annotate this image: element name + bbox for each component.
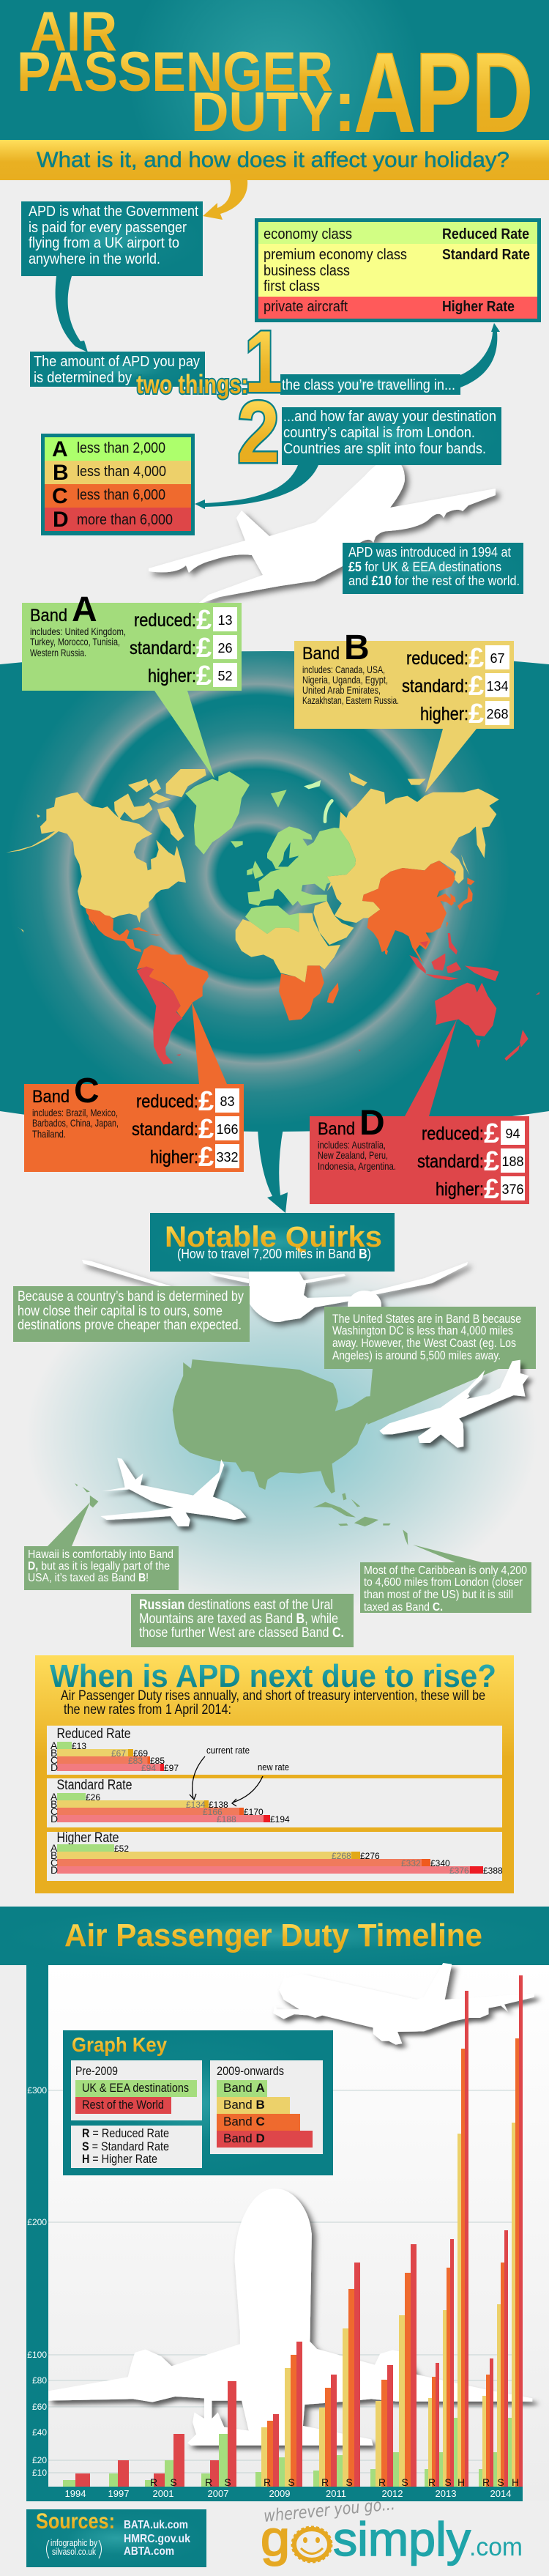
rate letters: R	[264, 2476, 271, 2488]
pointer: Hawaii	[48, 1502, 90, 1546]
panel: band A: Western Russia.	[30, 647, 86, 658]
panel: band D: 376	[501, 1182, 524, 1197]
chart: reduced rate: D	[51, 1762, 58, 1773]
key: 2009-onwards: Band A	[223, 2081, 265, 2095]
bars: 2014	[479, 1975, 523, 2487]
plane left	[100, 1458, 247, 1526]
chart: higher rate: £52	[114, 1844, 129, 1854]
annotation: current rate	[190, 1745, 250, 1800]
panel: band A: £	[196, 661, 212, 691]
panel: band D: £	[484, 1174, 499, 1205]
gosimply logo: simply	[333, 2512, 471, 2566]
band distance table	[41, 434, 195, 535]
panel: band A: 26	[217, 641, 233, 656]
panel: band B: £	[468, 671, 484, 702]
chart: standard rate: B	[51, 1798, 57, 1810]
chart axis: £40	[32, 2427, 47, 2438]
panel: band D: New Zealand, Peru,	[318, 1149, 388, 1161]
sources: infographic by	[51, 2537, 97, 2548]
chart: standard rate	[47, 1778, 502, 1827]
key: rate letters: H = Higher Rate	[82, 2152, 157, 2166]
sources	[26, 2509, 206, 2567]
US map	[75, 1359, 408, 1545]
panel: band B: 67	[490, 651, 505, 666]
chart: higher rate: £388	[483, 1866, 503, 1876]
panel: band B: 268	[486, 707, 509, 721]
panel: band C: 332	[216, 1150, 239, 1165]
world map background with rings	[0, 651, 549, 1132]
panel: band B: Kazakhstan, Eastern Russia.	[302, 694, 399, 706]
bars: 2009	[255, 2342, 302, 2487]
panel: band A: reduced:	[134, 610, 196, 631]
intro text box	[21, 201, 203, 276]
chart axis: £80	[32, 2375, 47, 2386]
chart: reduced rate: £83	[128, 1756, 143, 1766]
quirk box: United States: Angeles) is around 5,500 miles away.	[332, 1348, 501, 1362]
band distance table: less than 6,000	[77, 487, 165, 503]
subtitle band: What is it, and how does it affect your holiday?	[37, 148, 509, 172]
distance box: Countries are split into four bands.	[283, 441, 486, 457]
panel: band D: standard:	[417, 1151, 484, 1172]
band distance table: more than 6,000	[77, 512, 173, 528]
key: 2009-onwards: Band B	[223, 2098, 265, 2112]
chart: standard rate: Standard Rate	[57, 1778, 132, 1793]
distance box: country’s capital is from London.	[283, 425, 475, 441]
quirk box: Russia: Mountains are taxed as Band B, while	[139, 1611, 338, 1627]
class table: premium economy class	[264, 247, 407, 263]
key: rate letters: R = Reduced Rate	[82, 2126, 169, 2140]
annotation: new rate	[232, 1762, 289, 1806]
bars: 2012	[370, 2244, 417, 2487]
notable quirks heading: Notable Quirks	[165, 1221, 382, 1253]
chart: reduced rate: Reduced Rate	[57, 1726, 130, 1742]
rate letters: S	[346, 2476, 353, 2488]
sources: ABTA.com	[124, 2545, 174, 2558]
gosimply logo: g	[261, 2511, 290, 2566]
key: pre-2009: UK & EEA destinations	[82, 2081, 189, 2095]
quirk box: Caribbean: to 4,600 miles from London (closer	[364, 1576, 523, 1589]
two things: two things:	[136, 369, 248, 399]
chart: higher rate: £340	[430, 1858, 450, 1868]
bars: 1994	[63, 2473, 90, 2487]
intro text box: flying from a UK airport to	[29, 235, 179, 251]
map: Americas	[6, 769, 250, 1064]
pointer: band A	[154, 691, 214, 779]
intro text: Air Passenger Duty rises annually, and short of treasury intervention, these will be	[61, 1688, 485, 1704]
chart: reduced rate: £85	[150, 1756, 165, 1766]
sources: BATA.uk.com	[124, 2519, 188, 2531]
chart: standard rate: £188	[217, 1814, 236, 1825]
quirk box: Caribbean: than most of the US) but it is still	[364, 1589, 513, 1601]
chart: higher rate	[47, 1830, 503, 1881]
chart: reduced rate: £13	[72, 1741, 86, 1751]
intro text: the new rates from 1 April 2014:	[64, 1702, 231, 1718]
chart: reduced rate: £69	[133, 1748, 148, 1759]
title: PASSENGER	[17, 41, 333, 103]
chart axis: 1997	[108, 2488, 129, 2499]
class table: Standard Rate	[442, 247, 530, 263]
panel: band C: £	[198, 1114, 214, 1145]
panel: band B	[294, 628, 514, 730]
quirk box: Hawaii	[24, 1546, 179, 1590]
class table: first class	[264, 278, 320, 294]
quirk box: Russia: those further West are classed Band C.	[139, 1625, 344, 1641]
gosimply logo: .com	[469, 2533, 523, 2561]
chart: reduced rate	[47, 1726, 502, 1775]
chart: higher rate: £332	[401, 1858, 421, 1868]
panel: band C: higher:	[150, 1147, 198, 1168]
panel: band D: D	[359, 1104, 385, 1143]
chart axis: 2009	[269, 2488, 290, 2499]
bars: 2007	[201, 2381, 236, 2487]
chart: higher rate: £276	[360, 1851, 380, 1861]
panel: band D: reduced:	[422, 1124, 484, 1144]
panel: band C: £	[198, 1086, 214, 1117]
bars: 1997	[109, 2460, 129, 2487]
rate letters: R	[378, 2476, 386, 2488]
pointer: Caribbean	[413, 1545, 482, 1562]
chart: higher rate: B	[51, 1849, 57, 1861]
quirk box: Russia: Russian destinations east of the Ural	[139, 1597, 333, 1613]
graph key	[63, 2030, 333, 2175]
rate letters: S	[444, 2476, 452, 2488]
pointer: band B	[425, 729, 477, 793]
panel: band B: 134	[486, 679, 509, 694]
annotation: new rate: new rate	[258, 1762, 289, 1773]
panel: band B: reduced:	[406, 648, 468, 669]
gosimply logo	[261, 2495, 523, 2566]
class table: private aircraft	[264, 299, 348, 315]
class table: business class	[264, 263, 350, 279]
title: :	[334, 65, 356, 147]
rate letters: R	[150, 2476, 157, 2488]
chart: standard rate: £166	[203, 1807, 223, 1817]
rate letters: H	[512, 2476, 519, 2488]
icon: smiley sun	[292, 2527, 332, 2562]
panel: band C: 83	[220, 1094, 235, 1109]
title: AIR	[30, 1, 117, 63]
chart axis: £10	[32, 2468, 47, 2478]
panel: band A: standard:	[130, 638, 196, 658]
panel: band C: Barbados, China, Japan,	[32, 1117, 119, 1129]
big plane shadowed	[149, 459, 496, 605]
panel: band B: standard:	[402, 676, 468, 697]
intro 1994 box	[343, 543, 523, 594]
chart: standard rate: C	[51, 1805, 58, 1817]
quirk box: Hawaii: D, but as it is legally part of the	[28, 1560, 170, 1573]
amount text box: is determined by	[34, 370, 132, 386]
pointer: band C	[192, 1002, 227, 1084]
subtitle band	[0, 140, 549, 180]
panel: band C	[24, 1072, 244, 1173]
panel: band A: 52	[217, 669, 233, 683]
chart axis: 1994	[65, 2488, 86, 2499]
arrow: gold to intro	[203, 180, 247, 220]
chart: reduced rate: C	[51, 1754, 58, 1766]
key: 2009-onwards: Band C	[223, 2115, 265, 2128]
panel: band B: £	[468, 643, 484, 674]
map: Europe, Asia and Africa	[231, 773, 499, 1020]
quirk box: Hawaii: USA, it’s taxed as Band B!	[28, 1572, 149, 1584]
chart: standard rate: £26	[86, 1792, 100, 1803]
chart axis: £100	[27, 2350, 47, 2360]
bars: 2011	[313, 2263, 360, 2487]
panel: band A: A	[72, 590, 97, 629]
chart: reduced rate: £97	[164, 1763, 179, 1773]
panel: band C: reduced:	[136, 1091, 198, 1112]
chart: reduced rate: A	[51, 1740, 58, 1751]
intro text box: APD is what the Government	[29, 204, 198, 220]
chart axis	[26, 1965, 523, 2501]
chart axis: 2007	[208, 2488, 228, 2499]
panel: band A: 13	[217, 613, 233, 628]
band distance table: D	[53, 508, 69, 532]
numeral 1: 1	[244, 313, 283, 411]
quirk box: Hawaii: Hawaii is comfortably into Band	[28, 1548, 173, 1561]
distance box	[282, 407, 501, 465]
band distance table: C	[52, 484, 68, 508]
intro text box: anywhere in the world.	[29, 251, 160, 267]
plane right	[379, 1360, 529, 1448]
timeline heading: Air Passenger Duty Timeline	[64, 1918, 482, 1953]
panel: band A	[22, 590, 242, 691]
panel: band C: £	[198, 1142, 214, 1173]
quirk box: United States	[324, 1307, 536, 1369]
chart: higher rate: C	[51, 1857, 58, 1868]
bars: 2001	[145, 2434, 184, 2487]
panel: band C: Band	[32, 1087, 70, 1107]
quirk box: capital distance	[13, 1286, 250, 1342]
panel: band C: standard:	[132, 1119, 198, 1140]
rate letters: R	[482, 2476, 490, 2488]
sources: Sources:	[36, 2509, 115, 2534]
chart: higher rate: D	[51, 1864, 58, 1876]
chart axis: 2013	[436, 2488, 456, 2499]
band distance table: B	[53, 461, 69, 485]
plane: chart top	[273, 1963, 534, 2045]
chart: reduced rate: £94	[141, 1763, 156, 1773]
chart axis: 2011	[326, 2488, 346, 2499]
panel: band D: includes: Australia,	[318, 1139, 386, 1151]
class table	[255, 218, 541, 322]
band distance table: A	[52, 437, 68, 461]
class travelling box: the class you’re travelling in...	[282, 377, 455, 393]
quirk box: Caribbean: taxed as Band C.	[364, 1601, 443, 1614]
bars: 2013	[425, 1991, 468, 2487]
quirk box: capital distance: how close their capital is to ours, some	[18, 1304, 223, 1319]
panel: band D	[310, 1104, 529, 1205]
panel: band B: Band	[302, 644, 340, 664]
class table: economy class	[264, 226, 352, 242]
notable quirks heading	[150, 1213, 395, 1272]
chart: reduced rate: £67	[111, 1748, 126, 1759]
panel: band D: 188	[501, 1154, 524, 1169]
chart: higher rate: Higher Rate	[57, 1830, 119, 1846]
panel: band D: higher:	[436, 1179, 484, 1200]
graph key: Graph Key	[72, 2033, 167, 2056]
annotation: current rate: current rate	[206, 1745, 250, 1756]
chart: higher rate: £268	[332, 1851, 351, 1861]
key: rate letters	[71, 2126, 202, 2168]
key: 2009-onwards: 2009-onwards	[217, 2064, 284, 2078]
intro text box: is paid for every passenger	[29, 220, 187, 236]
sources: HMRC.gov.uk	[124, 2533, 190, 2545]
plane: chart large	[48, 2189, 532, 2446]
gosimply logo: wherever you go...	[263, 2495, 396, 2526]
amount text box: The amount of APD you pay	[34, 354, 200, 370]
quirk box: capital distance: Because a country’s band is determined by	[18, 1289, 244, 1304]
panel: band B: includes: Canada, USA,	[302, 664, 385, 675]
header background	[0, 0, 549, 140]
chart axis: £60	[32, 2402, 47, 2412]
panel: band D: £	[484, 1146, 499, 1177]
arrow: map to quirks	[258, 1128, 288, 1213]
chart: higher rate: A	[51, 1842, 58, 1854]
panel: band A: Turkey, Morocco, Tunisia,	[30, 636, 120, 647]
arrow: intro to amount	[56, 276, 88, 352]
chart axis: £200	[27, 2217, 47, 2227]
panel: band A: £	[196, 605, 212, 636]
panel: band A: includes: United Kingdom,	[30, 626, 126, 637]
title: DUTY	[191, 81, 333, 144]
class table: Higher Rate	[442, 299, 515, 315]
rate letters: S	[170, 2476, 177, 2488]
chart: standard rate: £134	[186, 1800, 206, 1810]
rate letters: S	[288, 2476, 295, 2488]
quirk box: Caribbean: Most of the Caribbean is only 4,200	[364, 1564, 527, 1577]
sources: silvasol.co.uk	[52, 2546, 96, 2557]
key: 2009-onwards	[210, 2060, 323, 2154]
rate letters: R	[205, 2476, 212, 2488]
quirk box: United States: Washington DC is less than 4,000 miles	[332, 1324, 513, 1337]
panel: band A: Band	[30, 606, 67, 626]
chart axis: 2001	[153, 2488, 173, 2499]
intro 1994 box: and £10 for the rest of the world.	[348, 574, 520, 588]
quirk box: Caribbean	[360, 1562, 531, 1614]
distance box: ...and how far away your destination	[283, 409, 496, 425]
key: 2009-onwards: Band D	[223, 2131, 265, 2145]
quirks plane top	[82, 1260, 468, 1322]
quirks glow	[26, 1256, 538, 1615]
chart: standard rate: A	[51, 1791, 58, 1803]
world map	[6, 769, 539, 1064]
panel: band D: 94	[505, 1126, 520, 1141]
chart background	[48, 1965, 549, 2501]
rate letters: S	[497, 2476, 504, 2488]
amount text box	[30, 352, 205, 387]
intro 1994 box: APD was introduced in 1994 at	[348, 545, 511, 560]
panel: band B: B	[344, 628, 370, 667]
panel: band C: Thailand.	[32, 1128, 66, 1140]
chart: standard rate: £194	[270, 1814, 290, 1825]
intro text	[61, 1688, 485, 1718]
chart axis: 2012	[382, 2488, 403, 2499]
notable quirks heading: (How to travel 7,200 miles in Band B)	[177, 1247, 371, 1261]
chart: higher rate: £376	[449, 1866, 469, 1876]
numeral 2: 2	[237, 383, 280, 481]
key: pre-2009: Rest of the World	[82, 2098, 164, 2112]
chart axis: 2014	[490, 2488, 511, 2499]
quirk box: Russia	[131, 1594, 354, 1647]
chart axis: £20	[32, 2455, 47, 2465]
chart: standard rate: £170	[244, 1807, 264, 1817]
key: pre-2009	[71, 2060, 202, 2120]
panel: band A: £	[196, 633, 212, 664]
rate letters: H	[458, 2476, 465, 2488]
key: pre-2009: Pre-2009	[75, 2064, 118, 2078]
rate letters: S	[401, 2476, 408, 2488]
key: rate letters: S = Standard Rate	[82, 2139, 169, 2153]
panel: band C: 166	[216, 1122, 239, 1137]
panel: band C: C	[74, 1072, 100, 1110]
rate letters	[150, 2476, 519, 2488]
panel: band D: Band	[318, 1119, 355, 1139]
intro 1994 box: £5 for UK & EEA destinations	[348, 560, 501, 574]
chart: standard rate: £138	[209, 1800, 228, 1810]
rate letters: R	[428, 2476, 436, 2488]
chart: standard rate: D	[51, 1813, 58, 1825]
pointer: band D	[405, 1020, 457, 1116]
panel: band D: £	[484, 1118, 499, 1149]
band distance table: less than 2,000	[77, 440, 165, 456]
panel: band B: higher:	[420, 704, 468, 724]
panel: next rise	[35, 1655, 514, 1893]
pointer: US	[367, 1369, 498, 1425]
title	[17, 1, 533, 155]
arrow: to class table	[460, 323, 500, 387]
panel: band B: Nigeria, Uganda, Egypt,	[302, 674, 388, 686]
panel: band B: £	[468, 699, 484, 730]
panel: band D: Indonesia, Argentina.	[318, 1160, 396, 1172]
rate letters: S	[224, 2476, 231, 2488]
arrow: to bands	[195, 465, 318, 509]
chart axis: £300	[27, 2085, 47, 2096]
bar chart	[63, 1975, 523, 2488]
panel: band A: higher:	[148, 666, 196, 686]
chart: reduced rate: B	[51, 1747, 57, 1759]
heading: next rise: When is APD next due to rise?	[50, 1658, 496, 1694]
rate letters: R	[321, 2476, 329, 2488]
quirk box: capital distance: destinations prove cheaper than expected.	[18, 1318, 242, 1333]
timeline heading	[0, 1907, 549, 1965]
panel: band C: includes: Brazil, Mexico,	[32, 1107, 118, 1118]
band distance table: less than 4,000	[77, 464, 166, 480]
panel: band B: United Arab Emirates,	[302, 684, 381, 696]
class table: Reduced Rate	[442, 226, 529, 242]
map: Indonesia and Oceania	[358, 933, 539, 1061]
